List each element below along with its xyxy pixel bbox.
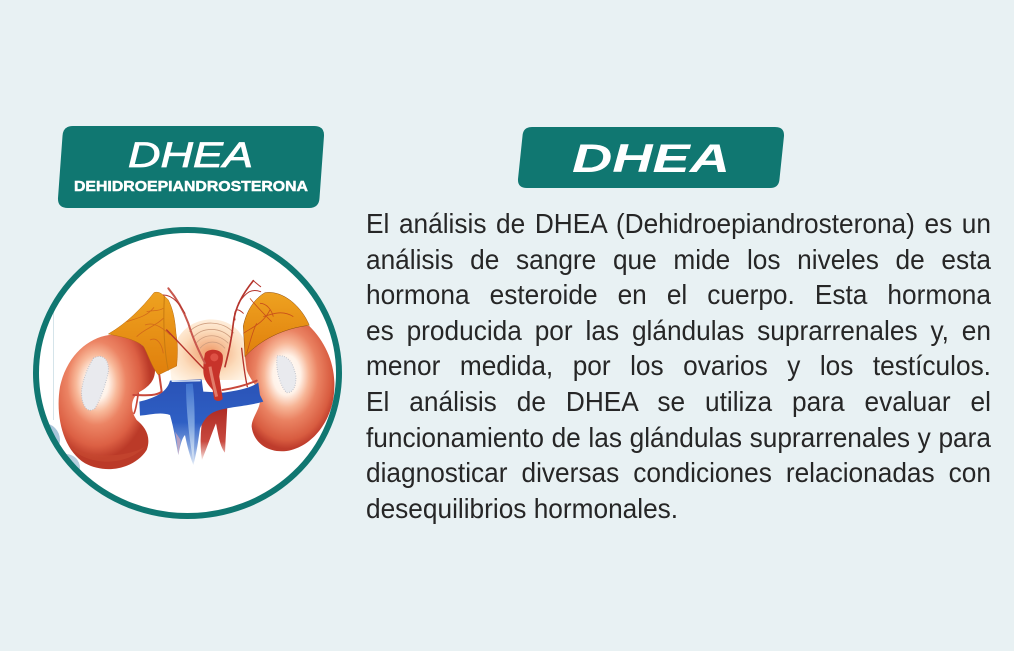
- text block: DHEA description: El análisis de DHEA se utiliza para evaluar el: [366, 386, 991, 417]
- text block: DHEA description: menor medida, por los ovarios y los testículos.: [366, 350, 991, 381]
- image: circular kidney and adrenal illustration: [26, 230, 339, 516]
- text block: DHEA description: es producida por las glándulas suprarrenales y, en: [366, 315, 991, 346]
- text block: DHEA description: [366, 208, 991, 524]
- red arteries: [133, 281, 261, 413]
- blue renal veins and vena cava: [139, 379, 263, 465]
- text block: DHEA description: funcionamiento de las glándulas suprarrenales y para: [366, 422, 991, 453]
- halo behind the vessels: [170, 319, 250, 380]
- decorative pale shapes at the lower left of the circle: [49, 312, 80, 470]
- left adrenal gland: [108, 292, 177, 375]
- illustration in zoomed coordinates: [59, 281, 334, 469]
- text block: DHEA description: diagnosticar diversas condiciones relacionadas con: [366, 457, 991, 488]
- left kidney: [59, 335, 155, 469]
- text block: DHEA description: análisis de sangre que mide los niveles de esta: [366, 244, 991, 275]
- heading: DHEA: DHEA: [572, 137, 730, 181]
- badge: left DHEA title: [58, 126, 324, 208]
- badge: right DHEA title: [518, 127, 784, 188]
- text block: DHEA description: El análisis de DHEA (Dehidroepiandrosterona) es un: [366, 208, 991, 239]
- heading: DHEA: DHEA: [128, 135, 253, 175]
- text block: DHEA description: desequilibrios hormonales.: [366, 493, 678, 524]
- right adrenal gland: [243, 292, 309, 357]
- red descending artery: [201, 407, 227, 460]
- text block: DHEA description: hormona esteroide en el cuerpo. Esta hormona: [366, 279, 991, 310]
- right kidney: [245, 326, 334, 451]
- central aorta: [203, 350, 223, 401]
- subheading: full hormone name: DEHIDROEPIANDROSTERONA: [74, 178, 308, 195]
- teal circle ring: [36, 230, 339, 516]
